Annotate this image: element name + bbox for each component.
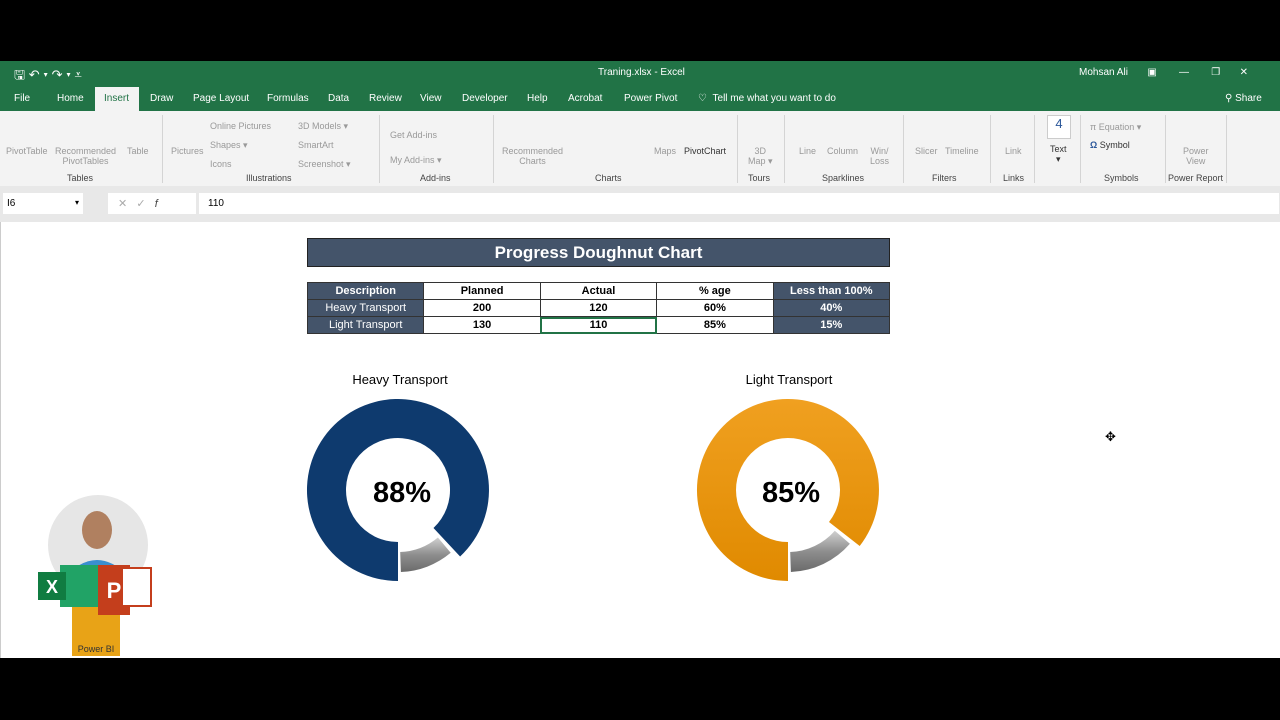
ribbon tabs: ⚲ Share	[1225, 93, 1262, 104]
ribbon tabs: Draw	[150, 93, 173, 104]
ribbon: Filters	[932, 173, 956, 183]
ribbon tabs: Help	[527, 93, 548, 104]
ribbon: Map ▾	[748, 156, 773, 166]
ribbon: Recommended	[55, 146, 116, 156]
ribbon tabs: ♡ Tell me what you want to do	[698, 93, 836, 104]
ribbon tabs: Acrobat	[568, 93, 602, 104]
ribbon: SmartArt	[298, 140, 334, 150]
ribbon: PivotChart	[684, 146, 726, 156]
ribbon: Line	[799, 146, 816, 156]
doughnut: heavy: 88%	[373, 477, 431, 509]
ribbon: Loss	[870, 156, 889, 166]
ribbon: Link	[1005, 146, 1022, 156]
ribbon tabs: Page Layout	[193, 93, 249, 104]
ribbon: Timeline	[945, 146, 979, 156]
title banner: Progress Doughnut Chart	[495, 243, 702, 262]
title banner	[307, 238, 890, 267]
ribbon: π Equation ▾	[1090, 122, 1141, 132]
ribbon: Screenshot ▾	[298, 159, 351, 169]
ribbon: Charts	[595, 173, 622, 183]
data table: Light Transport	[329, 319, 402, 331]
ribbon: Get Add-ins	[390, 130, 437, 140]
ribbon: Online Pictures	[210, 121, 271, 131]
ribbon	[0, 111, 1280, 186]
ribbon tabs: Developer	[462, 93, 508, 104]
ribbon: Maps	[654, 146, 676, 156]
worksheet	[0, 222, 1280, 658]
data table: 15%	[820, 319, 842, 331]
ribbon: Charts	[519, 156, 546, 166]
chart: heavy transport: Heavy Transport	[352, 372, 448, 387]
ribbon: Tables	[67, 173, 93, 183]
doughnut: heavy	[307, 399, 489, 581]
data table	[307, 282, 890, 334]
data table: Description	[335, 285, 396, 297]
ribbon: Illustrations	[246, 173, 292, 183]
ribbon: Win/	[870, 146, 888, 156]
excel title bar: Traning.xlsx - Excel	[598, 67, 685, 78]
data table: 130	[473, 319, 491, 331]
ribbon: Power	[1183, 146, 1209, 156]
ribbon tabs: Power Pivot	[624, 93, 677, 104]
data table: Planned	[461, 285, 503, 297]
data table: Actual	[582, 285, 615, 297]
ribbon: Ω Symbol	[1090, 140, 1130, 150]
formula bar: ▾	[75, 198, 79, 207]
ribbon: Add-ins	[420, 173, 451, 183]
formula bar: ✕ ✓ f	[118, 198, 158, 210]
formula bar	[0, 186, 1280, 222]
ribbon tabs: Review	[369, 93, 402, 104]
ribbon: View	[1186, 156, 1205, 166]
data table: Less than 100%	[790, 285, 873, 297]
ribbon: Column	[827, 146, 858, 156]
ribbon tabs	[14, 87, 1262, 111]
presenter logo: X	[46, 577, 58, 597]
data table: Heavy Transport	[325, 302, 406, 314]
ribbon: Sparklines	[822, 173, 864, 183]
ribbon: ▾	[1056, 154, 1061, 164]
data table: 120	[589, 302, 608, 314]
ribbon: Power Report	[1168, 173, 1223, 183]
presenter logo	[38, 495, 151, 656]
ribbon: 4	[1055, 116, 1063, 131]
ribbon: Links	[1003, 173, 1024, 183]
ribbon: Text	[1050, 144, 1067, 154]
ribbon tabs: Data	[328, 93, 349, 104]
chart: light transport: Light Transport	[746, 372, 832, 387]
ribbon tabs: Home	[57, 93, 84, 104]
formula bar: I6	[7, 198, 15, 209]
ribbon: Table	[127, 146, 149, 156]
cursor icon: ✥	[1105, 429, 1116, 444]
presenter logo: P	[107, 578, 121, 603]
data table: 110	[590, 319, 607, 331]
formula bar: 110	[208, 198, 224, 209]
ribbon: Tours	[748, 173, 770, 183]
ribbon: Pictures	[171, 146, 204, 156]
ribbon tabs: File	[14, 93, 30, 104]
ribbon: Shapes ▾	[210, 140, 248, 150]
presenter logo: Power BI	[78, 644, 114, 654]
ribbon: PivotTable	[6, 146, 48, 156]
ribbon: 3D	[754, 146, 766, 156]
data table: 200	[473, 302, 491, 314]
ribbon: 3D Models ▾	[298, 121, 348, 131]
excel title bar: Mohsan Ali ▣ — ❐ ✕	[1079, 67, 1248, 78]
ribbon tabs: Formulas	[267, 93, 309, 104]
ribbon: Recommended	[502, 146, 563, 156]
excel title bar: 🖫 ↶ ▾ ↷ ▾ ⩡	[14, 67, 82, 82]
ribbon tabs: View	[420, 93, 442, 104]
ribbon: Symbols	[1104, 173, 1139, 183]
ribbon: PivotTables	[62, 156, 109, 166]
ribbon tabs: Insert	[104, 93, 129, 104]
ribbon: Icons	[210, 159, 232, 169]
data table: 60%	[704, 302, 726, 314]
ribbon: Slicer	[915, 146, 938, 156]
excel title bar	[0, 61, 1280, 111]
data table: % age	[699, 285, 731, 297]
doughnut: light: 85%	[762, 477, 820, 509]
data table: 40%	[820, 302, 842, 314]
data table: 85%	[704, 319, 726, 331]
ribbon: My Add-ins ▾	[390, 155, 442, 165]
doughnut: light	[697, 399, 879, 581]
